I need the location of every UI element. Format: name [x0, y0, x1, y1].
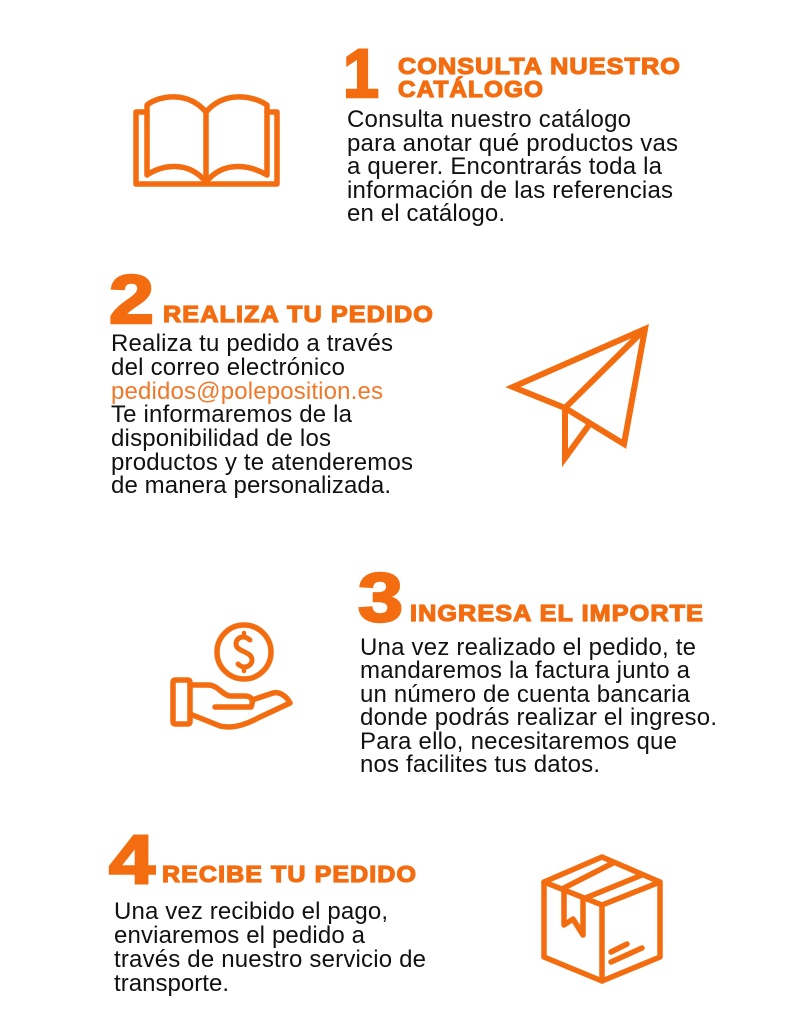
heading: consulta nuestro catálogo	[398, 53, 681, 102]
text block: step 2 description: Realiza tu pedido a través	[111, 330, 393, 357]
icon: hand with coin	[173, 625, 290, 727]
text block: step 1 description: en el catálogo.	[347, 200, 505, 227]
text block: step 2 description: de manera personalizada.	[111, 472, 391, 499]
text block: step 2 description	[111, 330, 413, 499]
text block: step 2 description: del correo electrónico	[111, 354, 345, 381]
icon: paper plane	[513, 329, 645, 458]
panel: step 2	[109, 261, 645, 499]
text block: step 1 description: información de las referencias	[347, 177, 673, 204]
number 4: 4	[109, 821, 155, 898]
text block: step 3 description: mandaremos la factura junto a	[360, 657, 691, 684]
number 3: 3	[358, 559, 403, 636]
number 1: 1	[343, 35, 379, 112]
text block: step 3 description: nos facilites tus datos.	[360, 751, 600, 778]
text block: step 2 description: disponibilidad de los	[111, 425, 331, 452]
heading: consulta nuestro catálogo: CONSULTA NUESTRO	[398, 53, 681, 79]
heading: ingresa el importe: INGRESA EL IMPORTE	[410, 600, 704, 626]
text block: step 3 description: Una vez realizado el pedido, te	[360, 634, 696, 661]
panel: step 3	[173, 559, 717, 778]
text block: step 1 description: a querer. Encontrarás toda la	[347, 153, 663, 180]
panel: step 1	[136, 35, 681, 227]
text block: step 3 description	[360, 634, 717, 778]
heading: realiza tu pedido: REALIZA TU PEDIDO	[163, 301, 434, 327]
heading: recibe tu pedido: RECIBE TU PEDIDO	[162, 861, 417, 887]
heading: consulta nuestro catálogo: CATÁLOGO	[398, 75, 544, 102]
icon: open book	[136, 97, 277, 184]
icon: cardboard box	[544, 857, 660, 981]
text block: step 2 description: pedidos@poleposition.es	[111, 378, 383, 405]
text block: step 1 description: Consulta nuestro catálogo	[347, 106, 631, 133]
text block: step 3 description: donde podrás realizar el ingreso.	[360, 704, 717, 731]
text block: step 3 description: Para ello, necesitaremos que	[360, 728, 677, 755]
number 2: 2	[109, 261, 154, 338]
text block: step 4 description: transporte.	[114, 970, 229, 997]
text block: step 4 description: enviaremos el pedido a	[114, 922, 366, 949]
panel: step 4	[109, 821, 660, 997]
text block: step 1 description: para anotar qué productos vas	[347, 130, 678, 157]
text block: step 4 description	[114, 898, 426, 997]
text block: step 3 description: un número de cuenta bancaria	[360, 681, 691, 708]
text block: step 1 description	[347, 106, 678, 227]
text block: step 2 description: Te informaremos de la	[111, 401, 353, 428]
text block: step 4 description: través de nuestro servicio de	[114, 946, 426, 973]
text block: step 4 description: Una vez recibido el pago,	[114, 898, 388, 925]
text block: step 2 description: productos y te atenderemos	[111, 449, 413, 476]
